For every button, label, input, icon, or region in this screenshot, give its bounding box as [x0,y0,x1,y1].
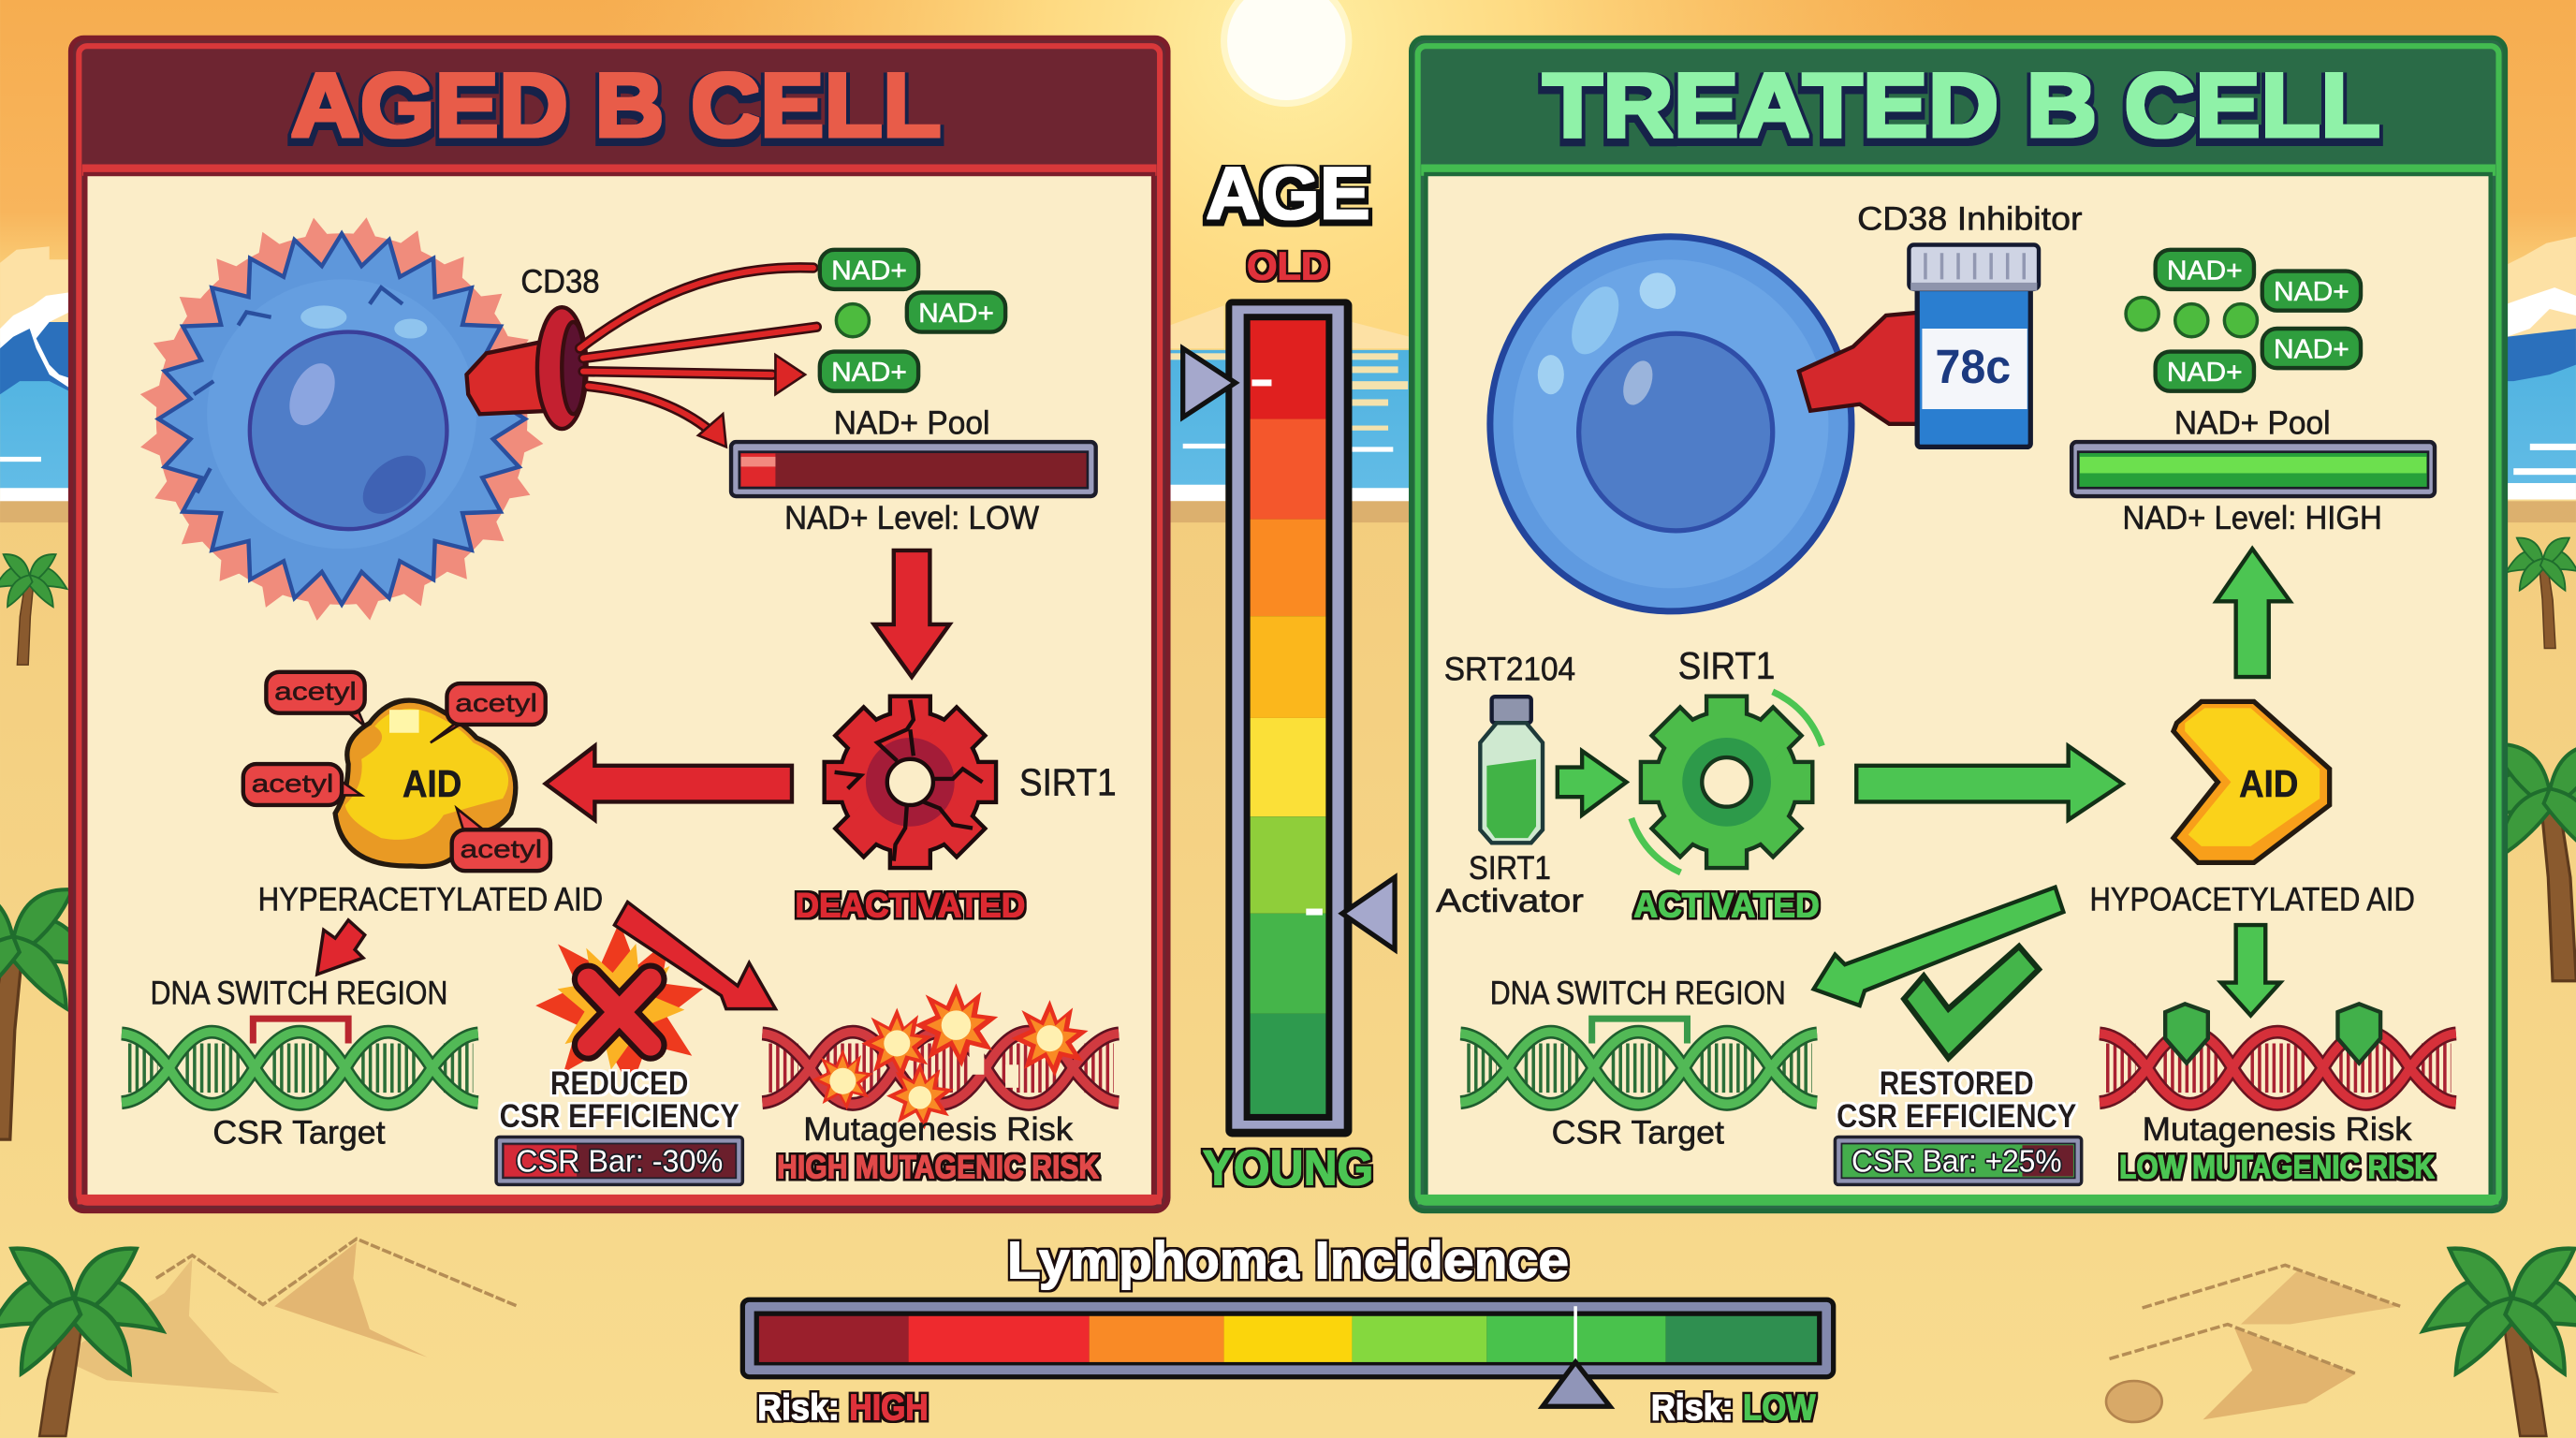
palm tree: lower right [2423,1249,2576,1436]
NAD+ pill 1: NAD+ [831,256,907,286]
label CSR target: CSR Target [212,1114,386,1151]
NAD+ pill 2: NAD+ [2274,277,2349,307]
label SRT2104: SRT2104 [1444,652,1575,688]
arrow: SIRT1 to AID [1856,746,2123,820]
arrow: AID up to NAD [2217,549,2291,677]
nucleus [1579,333,1773,531]
NAD+ pill 1: NAD+ [2167,256,2243,286]
NAD+ pill 3: NAD+ [831,358,907,388]
label risk high: Risk: [757,1387,840,1428]
CSR bar -30% [496,1137,742,1184]
heading: treated: TREATED B CELL [1543,56,2380,156]
lymphoma incidence [742,1230,1834,1428]
label CD38: CD38 [520,263,600,300]
label SIRT1 activator [1436,850,1584,919]
left wave crest [0,292,69,388]
label hyperacetylated AID: HYPERACETYLATED AID [258,881,603,917]
NAD+ pill 3 [2262,329,2361,368]
age column [1183,152,1395,1196]
hypoacetylated AID shape [2174,701,2330,862]
large arrow to mutagenesis [614,902,775,1009]
label mutagenesis risk: Mutagenesis Risk [2143,1111,2412,1148]
pale horizon bands [0,237,2576,353]
label reduced: REDUCED [550,1065,688,1102]
label DNA switch region: DNA SWITCH REGION [1490,975,1786,1011]
palm tree: lower left [0,1249,163,1436]
NAD+ pill 1 [2156,250,2254,289]
label CSR efficiency restored: CSR EFFICIENCY [1837,1098,2076,1135]
label NAD+ level high: NAD+ Level: HIGH [2123,500,2382,536]
label risk low: LOW [1743,1387,1816,1428]
heading lymphoma incidence: Lymphoma Incidence [1007,1230,1569,1289]
bracket [253,1019,348,1043]
risk bar [742,1299,1834,1377]
arrow down to DNA [2221,925,2280,1016]
label NAD+ pool: NAD+ Pool [2174,404,2331,441]
NAD+ level bar low [731,442,1096,496]
marker old [1183,348,1236,418]
label mutagenesis risk: Mutagenesis Risk [803,1111,1074,1148]
label SIRT1 activator: Activator [1436,883,1584,919]
left dunes [57,1239,518,1393]
NAD+ pill 3 [820,352,918,391]
arrow: activator to SIRT1 [1558,751,1627,814]
acetyl tag left [243,764,361,805]
arrow heads [698,355,805,447]
damaged DNA [762,983,1119,1129]
arrow: SIRT1 to AID [546,746,792,820]
hyperacetylated AID blob: AID [402,762,461,805]
check mark [1904,946,2039,1058]
marker young [1342,877,1395,949]
78c bottle: 78c [1935,340,2011,393]
shield 2 [2337,1004,2380,1064]
label CSR efficiency reduced: CSR EFFICIENCY [500,1098,739,1135]
label CD38 inhibitor: CD38 Inhibitor [1857,201,2083,238]
protected DNA [2100,1004,2456,1104]
label restored: RESTORED [1880,1065,2034,1102]
label NAD+ pool: NAD+ Pool [834,404,989,441]
left ocean wave [0,322,69,394]
label hypoacetylated AID: HYPOACETYLATED AID [2089,881,2415,917]
fire bursts [812,983,1089,1129]
NAD consuming arrows [580,268,816,431]
panel: treated B cell [1412,37,2505,1211]
acetyl tag bottom [452,808,550,871]
acetyl tag left: acetyl [252,769,333,798]
palm tree: small right [2506,538,2576,649]
label DNA switch region: DNA SWITCH REGION [151,975,447,1011]
status activated: ACTIVATED [1633,886,1820,924]
label old: OLD [1247,243,1329,287]
DNA helix left [122,1032,478,1104]
nucleus [250,332,446,529]
heading: aged: AGED B CELL [291,56,942,156]
DNA helix right [1460,1032,1817,1104]
label SIRT1: SIRT1 [1019,760,1117,803]
acetyl tag top right [431,683,546,742]
NAD+ pill 2 [907,292,1005,332]
palm tree: middle left [0,889,97,1139]
aged cell [115,193,568,645]
risk marker [1543,1362,1610,1406]
arrow: NAD to SIRT1 [874,550,949,677]
right dunes [2110,1265,2400,1419]
NAD+ pill 2: NAD+ [918,299,994,329]
label risk high [757,1387,929,1428]
NAD molecules [2126,298,2257,337]
palm tree: small left [0,554,66,665]
label risk high: HIGH [849,1387,929,1428]
NAD+ pill 1 [820,250,918,289]
deactivated SIRT1 gear [827,698,994,866]
status low mutagenic risk: LOW MUTAGENIC RISK [2119,1149,2436,1185]
label SIRT1 activator: SIRT1 [1469,850,1551,887]
label risk low: Risk: [1651,1387,1734,1428]
acetyl tag top left [266,672,365,726]
palm tree: middle right [2470,744,2576,981]
NAD+ pill 4 [2156,352,2254,391]
CD38 receptor [466,307,587,429]
heading age: AGE [1206,152,1370,234]
CSR bar +25% [1835,1137,2082,1184]
NAD+ pill 4: NAD+ [2167,358,2243,388]
sun [1224,0,1349,104]
activated SIRT1 gear [1632,692,1822,873]
small arrow to DNA [317,920,365,975]
label NAD+ level low: NAD+ Level: LOW [784,500,1039,536]
right ocean wave [2507,329,2576,381]
sea band [0,350,2576,522]
NAD molecule [836,304,869,337]
rock [2106,1381,2162,1422]
hypoacetylated AID shape: AID [2239,762,2298,805]
explosion with X [535,922,703,1090]
CD38 receptor blocked [1799,312,1922,424]
treated cell [1490,237,1852,611]
NAD+ pill 3: NAD+ [2274,335,2349,365]
acetyl tag bottom: acetyl [460,834,542,863]
label young: YOUNG [1203,1140,1373,1196]
78c bottle [1909,244,2039,447]
hyperacetylated AID blob [335,700,516,866]
status deactivated: DEACTIVATED [795,886,1025,924]
panel: aged B cell [71,37,1168,1211]
shield 1 [2165,1004,2208,1064]
right wave crest [2507,287,2576,337]
label CSR target: CSR Target [1552,1114,1724,1151]
NAD+ pill 2 [2262,271,2361,311]
status high mutagenic risk: HIGH MUTAGENIC RISK [777,1149,1100,1185]
label SIRT1: SIRT1 [1678,644,1775,687]
arrow to DNA switch [1814,888,2063,1005]
bracket [1592,1019,1687,1043]
SRT2104 vial [1480,697,1543,843]
label risk low [1651,1387,1816,1428]
age gauge [1225,299,1352,1137]
NAD+ level bar high [2071,442,2435,496]
acetyl tag top right: acetyl [455,688,537,717]
CSR bar +25%: CSR Bar: +25% [1852,1144,2062,1179]
CSR bar -30%: CSR Bar: -30% [516,1144,723,1179]
acetyl tag top left: acetyl [274,677,357,706]
